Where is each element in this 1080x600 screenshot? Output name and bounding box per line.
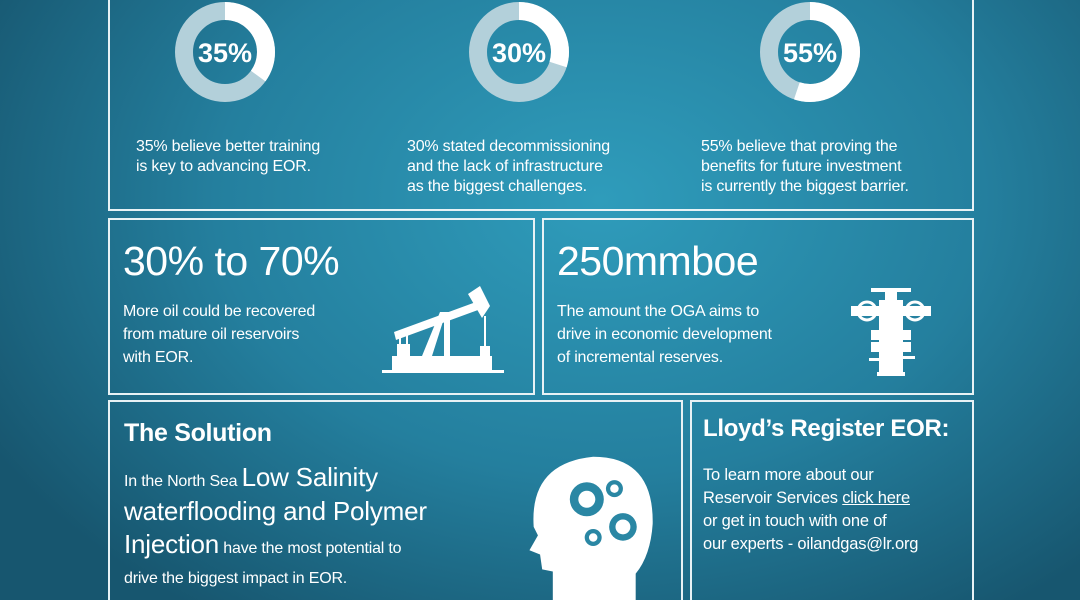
big number: 250mmboe xyxy=(557,238,758,284)
text: training: 35% believe better training xyxy=(136,138,320,155)
text: investment: is currently the biggest barrier. xyxy=(701,178,909,195)
text: solution: waterflooding and Polymer xyxy=(124,496,427,526)
text: The amount the OGA aims to xyxy=(557,303,759,320)
panel: 250mmboe xyxy=(542,218,974,395)
text: contact: To learn more about our xyxy=(703,466,874,484)
text xyxy=(557,303,772,366)
panel: survey donuts xyxy=(108,0,974,211)
text: contact xyxy=(703,466,918,553)
text: decommissioning: and the lack of infrastructure xyxy=(407,158,603,175)
big number: 30% to 70% xyxy=(123,238,339,284)
text xyxy=(123,303,315,366)
panel: the solution xyxy=(108,400,683,600)
heading: The Solution xyxy=(124,419,272,447)
icon: head with gears xyxy=(530,456,653,600)
text: More oil could be recovered xyxy=(123,303,315,320)
donut 35%: 35% xyxy=(198,38,252,68)
text: training: is key to advancing EOR. xyxy=(136,158,311,175)
donut 55%: 55% xyxy=(783,38,837,68)
text: solution: drive the biggest impact in EOR. xyxy=(124,570,347,586)
icon: pump jack xyxy=(382,286,504,373)
text: decommissioning xyxy=(407,138,610,195)
panel: Lloyd's Register xyxy=(690,400,974,600)
text: contact: our experts - oilandgas@lr.org xyxy=(703,535,918,553)
text: investment xyxy=(701,138,909,195)
donut 35% xyxy=(175,2,275,102)
donut 55% xyxy=(760,2,860,102)
text: contact: Reservoir Services click here xyxy=(703,489,910,507)
text: of incremental reserves. xyxy=(557,349,723,366)
text: with EOR. xyxy=(123,349,193,366)
text: contact: or get in touch with one of xyxy=(703,512,887,530)
text: investment: benefits for future investment xyxy=(701,158,901,175)
text: decommissioning: 30% stated decommissioning xyxy=(407,138,610,155)
heading: Lloyd’s Register EOR: xyxy=(703,415,949,442)
text: solution: In the North Sea Low Salinity xyxy=(124,462,378,492)
text: decommissioning: as the biggest challenges. xyxy=(407,178,587,195)
text: drive in economic development xyxy=(557,326,772,343)
panel: 30% to 70% xyxy=(108,218,535,395)
text: solution xyxy=(124,462,427,586)
donut 30%: 30% xyxy=(492,38,546,68)
text: training xyxy=(136,138,320,175)
text: solution: Injection have the most potential to xyxy=(124,529,401,559)
donut 30% xyxy=(469,2,569,102)
icon: wellhead xyxy=(851,288,931,376)
text: from mature oil reservoirs xyxy=(123,326,299,343)
text: investment: 55% believe that proving the xyxy=(701,138,897,155)
